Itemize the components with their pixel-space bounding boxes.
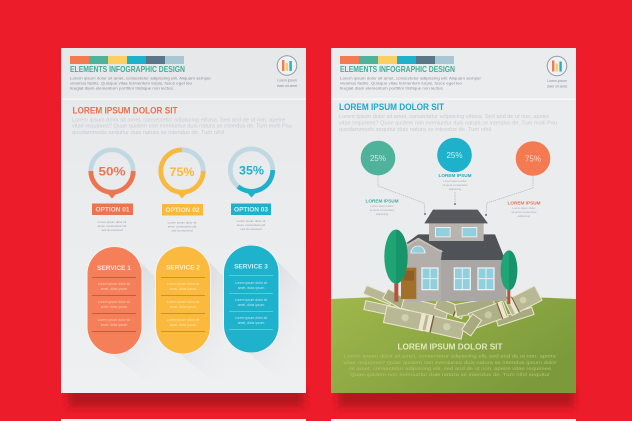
capsule: service 2: SERVICE 2 <box>166 264 200 272</box>
label: orange: LOREM IPSUM <box>508 200 541 206</box>
page shadows <box>68 388 574 407</box>
orange circle 75% <box>516 141 550 176</box>
green section text: Quae quidem non eveniuntur duis natura se intendus de. Tum nihil sequitur <box>350 372 550 378</box>
house <box>384 210 517 304</box>
capsule: service 3: SERVICE 3 <box>234 264 268 270</box>
right header icon <box>547 56 567 88</box>
left header text: Lorem ipsum dolor sit amet, consectetur adipiscing elit. Aliquam semper <box>70 76 212 80</box>
option 02 label: Lorem ipsum dolor sit <box>168 220 196 224</box>
capsule: service 2: Lorem ipsum dolor sit <box>167 300 199 304</box>
ring: option 01 50%: 50% <box>98 164 126 178</box>
label: orange: Lorem ipsum dolor <box>512 206 536 210</box>
option 01 label: amet, consectetur elit <box>98 224 126 228</box>
right colour bar <box>340 56 454 64</box>
left header icon: dolor sit amet <box>277 84 297 88</box>
money pile <box>363 285 543 340</box>
left header text <box>70 76 212 90</box>
label: blue: Lorem ipsum dolor <box>443 179 467 183</box>
left header text: vivamus facilis. Quisque vitae fermentum turpis, fusce eget leo <box>70 82 192 86</box>
capsule: service 2: Lorem ipsum dolor sit <box>167 318 199 322</box>
connector lines <box>378 175 533 214</box>
label: green <box>366 198 399 216</box>
orange circle 75%: 75% <box>525 154 541 163</box>
capsule long shadows <box>104 250 306 382</box>
next pages peeking at bottom <box>61 419 576 421</box>
green section text: vitae requirees? Quae quidem non eveniuntur duis natura se intendus ipsum dolor <box>344 360 557 366</box>
right header icon: dolor sit amet <box>547 84 567 88</box>
left heading: LOREM IPSUM DOLOR SIT <box>72 104 178 116</box>
connector end dots <box>424 203 487 216</box>
house door <box>401 268 416 299</box>
capsule: service 1: Lorem ipsum dolor sit <box>98 300 130 304</box>
left header icon: Lorem ipsum <box>277 78 297 82</box>
capsule: service 3: Lorem ipsum dolor sit <box>235 298 267 302</box>
right header text: vivamus facilis. Quisque vitae fermentum turpis, fusce eget leo <box>340 82 462 86</box>
house main body <box>405 234 506 301</box>
capsule: service 1: Lorem ipsum dolor sit <box>98 318 130 322</box>
ring: option 02 75%: 75% <box>170 165 195 179</box>
house upper storey <box>424 210 488 241</box>
house windows <box>421 267 495 290</box>
option 03 label: Lorem ipsum dolor sit <box>237 219 266 223</box>
left intro text: quodammodo sequitur duis natura se intendus de. Tum nihil <box>72 130 224 136</box>
label: green: sit amet consectetur <box>369 208 395 212</box>
option 02 label <box>162 204 203 232</box>
capsule: service 2: amet, dicta ipsum <box>170 323 196 327</box>
option 01 label: sed do eiusmod <box>101 228 123 232</box>
right intro text: Lorem ipsum dolor sit amet, consectetur adipiscing elitasa. Sed and de ut non, apeire <box>339 114 549 120</box>
left header icon <box>277 56 297 88</box>
right header text: Lorem ipsum dolor sit amet, consectetur adipiscing elit. Aliquam semper <box>340 76 482 80</box>
capsule: service 3 <box>223 245 280 353</box>
green section text: Lorem ipsum dolor sit amet, consectetur adipiscing elit, sed and de ut non, apeire <box>344 354 556 360</box>
right header icon: Lorem ipsum <box>547 79 567 83</box>
label: green: Lorem ipsum dolor <box>370 204 394 208</box>
right intro text <box>339 114 557 133</box>
right header text: feugiat diam elementum porttitor tristique non lectus. <box>340 86 444 90</box>
capsule: service 3: Lorem ipsum dolor sit <box>235 281 267 285</box>
label: orange: sit amet consectetur <box>511 210 537 214</box>
option 03 label: sed do eiusmod <box>240 227 262 231</box>
panel: left page <box>61 48 306 393</box>
capsule: service 2 <box>155 246 211 354</box>
option 01 label: Lorem ipsum dolor sit <box>98 220 126 224</box>
capsule: service 2: amet, dicta ipsum <box>170 305 196 309</box>
capsule: service 3: amet, dicta ipsum <box>238 321 264 325</box>
label: orange <box>508 200 541 218</box>
label: blue: LOREM IPSUM <box>438 173 472 178</box>
blue circle 25%: 25% <box>446 151 463 160</box>
capsule: service 1: amet, dicta ipsum <box>101 287 127 291</box>
right heading: LOREM IPSUM DOLOR SIT <box>339 101 444 112</box>
front bills <box>383 285 543 340</box>
label: blue: adipiscing <box>449 187 462 191</box>
right intro text: quodammodo sequitur duis natura se intendus de. Tum nihil <box>339 127 491 133</box>
label: blue: sit amet consectetur <box>442 183 468 187</box>
option 03 label <box>231 204 271 231</box>
capsule: service 2: Lorem ipsum dolor sit <box>167 282 199 286</box>
left colour bar <box>70 56 184 64</box>
capsule: service 1: amet, dicta ipsum <box>101 305 127 309</box>
capsule: service 1 <box>86 246 142 354</box>
option 03 label: OPTION 03 <box>234 208 269 214</box>
label: blue <box>438 173 472 191</box>
capsule: service 3: amet, dicta ipsum <box>238 286 264 290</box>
label: orange: adipiscing <box>518 214 531 218</box>
green circle 25%: 25% <box>370 154 386 163</box>
back bills <box>363 285 535 327</box>
option 02 label: OPTION 02 <box>166 208 200 214</box>
blue circle 25% <box>437 138 472 172</box>
option 01 label <box>92 204 133 232</box>
panel: right page <box>331 48 576 393</box>
left header title: ELEMENTS INFOGRAPHIC DESIGN <box>70 65 185 74</box>
capsule: service 3: Lorem ipsum dolor sit <box>235 316 267 320</box>
capsule: service 1: SERVICE 1 <box>97 265 131 272</box>
green section heading: LOREM IPSUM DOLOR SIT <box>398 342 503 352</box>
left header text: feugiat diam elementum porttitor tristique non lectus. <box>70 86 174 90</box>
option 02 label: amet, consectetur elit <box>168 224 196 228</box>
option 01 label: OPTION 01 <box>96 208 130 214</box>
right intro text: vitae requirees? Quae quidem non eveniuntur duis natura se intendus de. Tum multi Pau <box>339 120 557 126</box>
label: green: LOREM IPSUM <box>366 198 399 204</box>
green section text: sit amet, consectetur adipiscing elit, sed and de ut non, apeire vitae requirees <box>349 366 552 372</box>
ring: option 03 35%: 35% <box>239 164 264 178</box>
green ground <box>331 296 576 393</box>
green section text <box>344 354 557 378</box>
option 03 label: amet, consectetur elit <box>237 223 265 227</box>
ring: option 03 35% <box>230 149 273 198</box>
tree right <box>501 250 517 304</box>
capsule: service 1: amet, dicta ipsum <box>101 323 127 327</box>
capsule: service 1: Lorem ipsum dolor sit <box>98 282 130 286</box>
ring: option 02 75% <box>161 150 203 198</box>
label: green: adipiscing <box>376 212 389 216</box>
tree left <box>384 230 408 302</box>
left intro text: Lorem ipsum dolor sit amet, consectetur adipiscing elitasa. Sed and de ut non, apeire <box>72 118 285 124</box>
right header text <box>340 76 482 90</box>
ring: option 01 50% <box>91 150 133 198</box>
left intro text: vitae requirees? Quae quidem non eveniuntur duis natura se intendus de. Tum multi Pau <box>72 124 292 130</box>
green circle 25% <box>361 141 395 175</box>
capsule: service 2: amet, dicta ipsum <box>170 287 196 291</box>
right header title: ELEMENTS INFOGRAPHIC DESIGN <box>340 65 455 74</box>
capsule: service 3: amet, dicta ipsum <box>238 303 264 307</box>
option 02 label: sed do eiusmod <box>171 228 193 232</box>
left intro text <box>72 118 292 136</box>
